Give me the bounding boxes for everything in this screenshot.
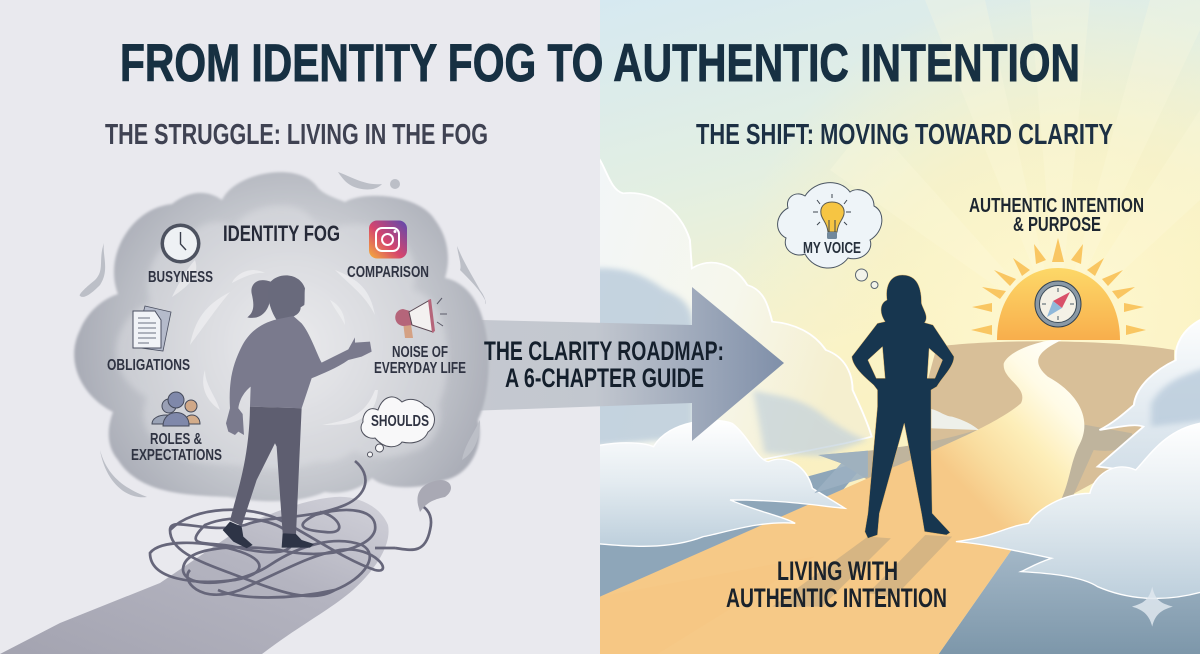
distant hill [928, 341, 1174, 494]
ground right [939, 550, 1200, 654]
fog wisps [80, 172, 486, 497]
label: roles and expectations [131, 431, 222, 464]
small cloud behind figure [931, 409, 979, 430]
legs [230, 407, 302, 535]
label: my voice: MY VOICE [803, 240, 861, 257]
arrow [440, 287, 784, 441]
front cloud left [592, 420, 845, 546]
figure shadows [772, 535, 952, 607]
sparkle [1132, 587, 1173, 627]
far road shadow [818, 424, 1132, 498]
icon: documents [133, 306, 171, 351]
ground left [600, 466, 856, 596]
label: authentic intention and purpose: & PURPOSE [1013, 214, 1101, 236]
wisp at rope end [417, 480, 451, 512]
torso and arms [226, 316, 372, 435]
label: busyness: BUSYNESS [148, 269, 213, 286]
road [600, 338, 1084, 654]
label: identity fog: IDENTITY FOG [223, 221, 340, 246]
fog swirls [172, 260, 378, 425]
label: authentic intention and purpose: AUTHENTIC INTENTION [969, 195, 1144, 217]
label: noise of everyday life [374, 344, 466, 377]
thought bubble: shoulds [361, 397, 434, 457]
tangled line [150, 461, 431, 598]
left road [0, 497, 389, 654]
sun rays [971, 238, 1146, 335]
right upper cloud [1098, 317, 1200, 480]
icon: clock [160, 224, 200, 264]
icon: megaphone [395, 298, 447, 338]
road darker strip [600, 557, 814, 654]
right panel landscape [592, 150, 1200, 654]
right front cloud [956, 422, 1200, 598]
label: noise of everyday life: EVERYDAY LIFE [374, 360, 466, 377]
icon: instagram [369, 220, 407, 258]
label: living with authentic intention: AUTHENTIC INTENTION [726, 583, 947, 613]
left figure [223, 275, 372, 548]
heading: the struggle: THE STRUGGLE: LIVING IN THE FOG [105, 119, 488, 151]
left panel background [0, 0, 600, 654]
label: obligations: OBLIGATIONS [107, 357, 190, 374]
arrow text: A 6-CHAPTER GUIDE [505, 363, 704, 393]
fog band [814, 451, 868, 493]
label: comparison: COMPARISON [347, 264, 429, 281]
label: living with authentic intention [726, 556, 947, 613]
icon: compass [1035, 281, 1081, 327]
fog cloud [74, 172, 489, 501]
right figure [852, 275, 954, 538]
right upper shade [1151, 367, 1200, 427]
label: roles and expectations: EXPECTATIONS [131, 447, 222, 464]
fog inner layer [116, 205, 447, 469]
ponytail [247, 280, 271, 318]
label: shoulds: SHOULDS [371, 413, 429, 430]
label: noise of everyday life: NOISE OF [392, 344, 448, 361]
icon: lightbulb [813, 194, 851, 239]
thought bubble: my voice [778, 183, 882, 288]
mid cloud shade [753, 390, 868, 457]
label: roles and expectations: ROLES & [150, 431, 202, 448]
shoes [223, 522, 314, 548]
right panel background [600, 0, 1200, 654]
arrow text [484, 336, 724, 393]
icon: people [152, 392, 200, 426]
head [268, 275, 305, 320]
sun [997, 268, 1120, 340]
label: living with authentic intention: LIVING WITH [777, 556, 898, 586]
arrow text: THE CLARITY ROADMAP: [484, 336, 724, 366]
back cloud left [592, 150, 872, 460]
back cloud shade [592, 268, 694, 447]
label: authentic intention and purpose [969, 195, 1144, 236]
